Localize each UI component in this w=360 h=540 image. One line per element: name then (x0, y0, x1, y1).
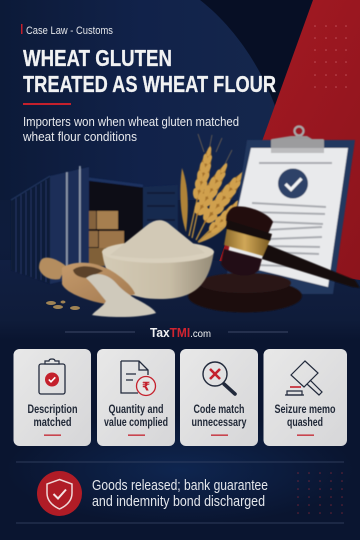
illustration: clipboard with checked document (224, 126, 355, 294)
title: WHEAT GLUTEN (23, 45, 172, 71)
illustration: bowl of flour (102, 220, 214, 299)
panel: seizure memo quashed: Seizure memo (274, 404, 336, 416)
dot pattern: top right (314, 25, 347, 88)
panel: description matched: Description (28, 404, 78, 416)
dot pattern: footer right (297, 472, 343, 514)
icon: shield badge (37, 471, 82, 516)
icon: magnifier with cross (203, 362, 235, 394)
panel: quantity and value complied (97, 349, 175, 446)
panel: code match unnecessary: unnecessary (192, 417, 247, 429)
panel: description matched (14, 349, 91, 446)
illustration: loose grains (46, 300, 80, 310)
outcome text: and indemnity bond discharged (92, 494, 265, 510)
panel: quantity and value complied: value complied (104, 417, 168, 429)
title: TREATED AS WHEAT FLOUR (23, 71, 276, 97)
outcome text (92, 478, 268, 510)
panel: code match unnecessary: Code match (194, 404, 244, 416)
illustration: wooden scoop with flour (39, 258, 156, 317)
panel: quantity and value complied: Quantity and (108, 404, 164, 416)
icon: document with rupee: ₹ (142, 380, 150, 394)
illustration: wheat stalks (180, 134, 254, 243)
illustration: gavel (188, 206, 360, 312)
clipboard clip (271, 126, 324, 153)
document lines (244, 163, 332, 267)
illustration: shipping container (11, 166, 178, 284)
title (23, 45, 276, 97)
subtitle (22, 114, 239, 144)
subtitle: Importers won when wheat gluten matched (23, 114, 239, 129)
panel: description matched: matched (34, 417, 72, 429)
panel: seizure memo quashed: quashed (287, 417, 323, 429)
icon: clipboard check (39, 359, 65, 394)
title underline (23, 103, 71, 105)
logo: TaxTMI.com: TaxTMI.com (150, 325, 211, 340)
icon: gavel outline (285, 361, 322, 395)
subtitle: wheat flour conditions (22, 129, 137, 144)
outcome text: Goods released; bank guarantee (92, 478, 268, 494)
panel: seizure memo quashed (264, 349, 347, 446)
footer divider lines (16, 462, 344, 523)
check badge (278, 168, 308, 198)
panel: code match unnecessary (180, 349, 258, 446)
eyebrow: case law label: Case Law - Customs (26, 25, 113, 37)
